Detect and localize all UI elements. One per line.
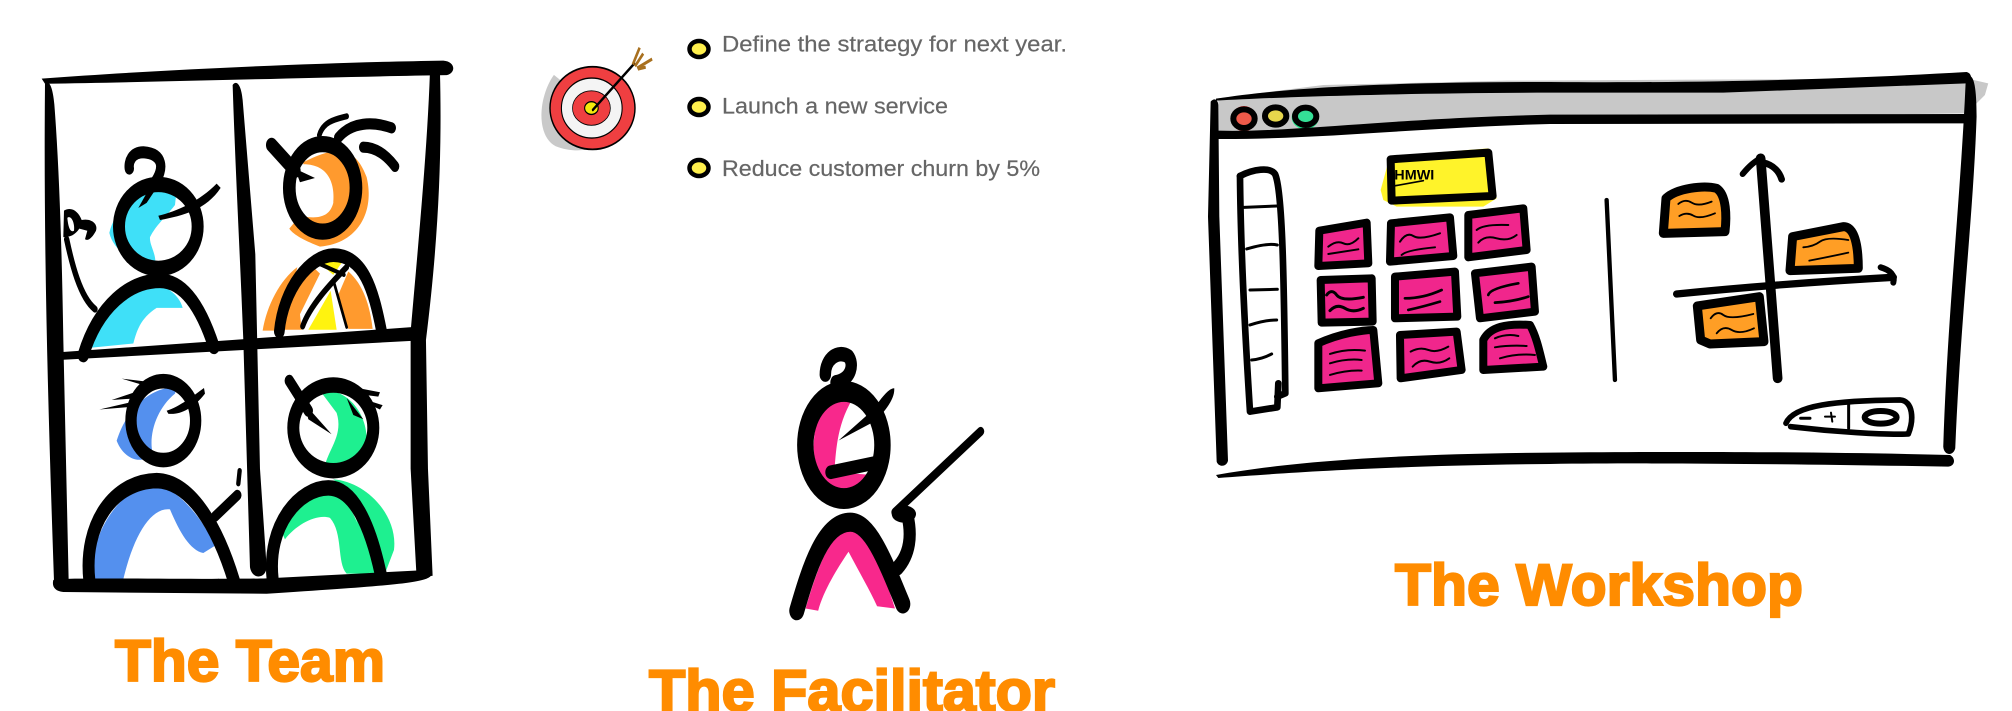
browser title bar: [1218, 78, 1988, 133]
objective 2: Launch a new service: [722, 94, 948, 118]
sticky note: HMWI: [1381, 148, 1497, 207]
quadrant chart and zoom control: [1663, 158, 1912, 434]
prioritisation axes: [1677, 158, 1894, 378]
objective 3: Reduce customer churn by 5%: [722, 156, 1040, 181]
objective 1: Define the strategy for next year.: [722, 32, 1067, 56]
panel: the team video grid: [42, 61, 453, 594]
zoom control widget: [1786, 400, 1912, 434]
objectives list: [690, 32, 1067, 181]
person 2: orange, with yellow tie: [263, 116, 395, 331]
heading: The Workshop: The Workshop: [1395, 553, 1803, 618]
icon: target with arrow: [541, 48, 652, 150]
person 1: cyan, waving: [63, 152, 221, 355]
orange sticky notes: [1663, 187, 1858, 344]
panel: the facilitator figure: [797, 354, 981, 611]
sticky note: HMWI: HMWI: [1394, 166, 1434, 182]
panel: the workshop browser window: [1208, 72, 1988, 478]
divider between clusters: [1607, 200, 1615, 380]
heading: The Team: The Team: [115, 629, 385, 694]
video grid frame: [42, 61, 453, 594]
person 3: blue, pointing: [89, 379, 240, 581]
sidebar toolbar: [1240, 170, 1285, 412]
window controls: [1231, 105, 1319, 131]
pink sticky note cluster: [1318, 208, 1543, 388]
browser frame: [1208, 72, 1977, 478]
person 4: green: [272, 381, 394, 579]
